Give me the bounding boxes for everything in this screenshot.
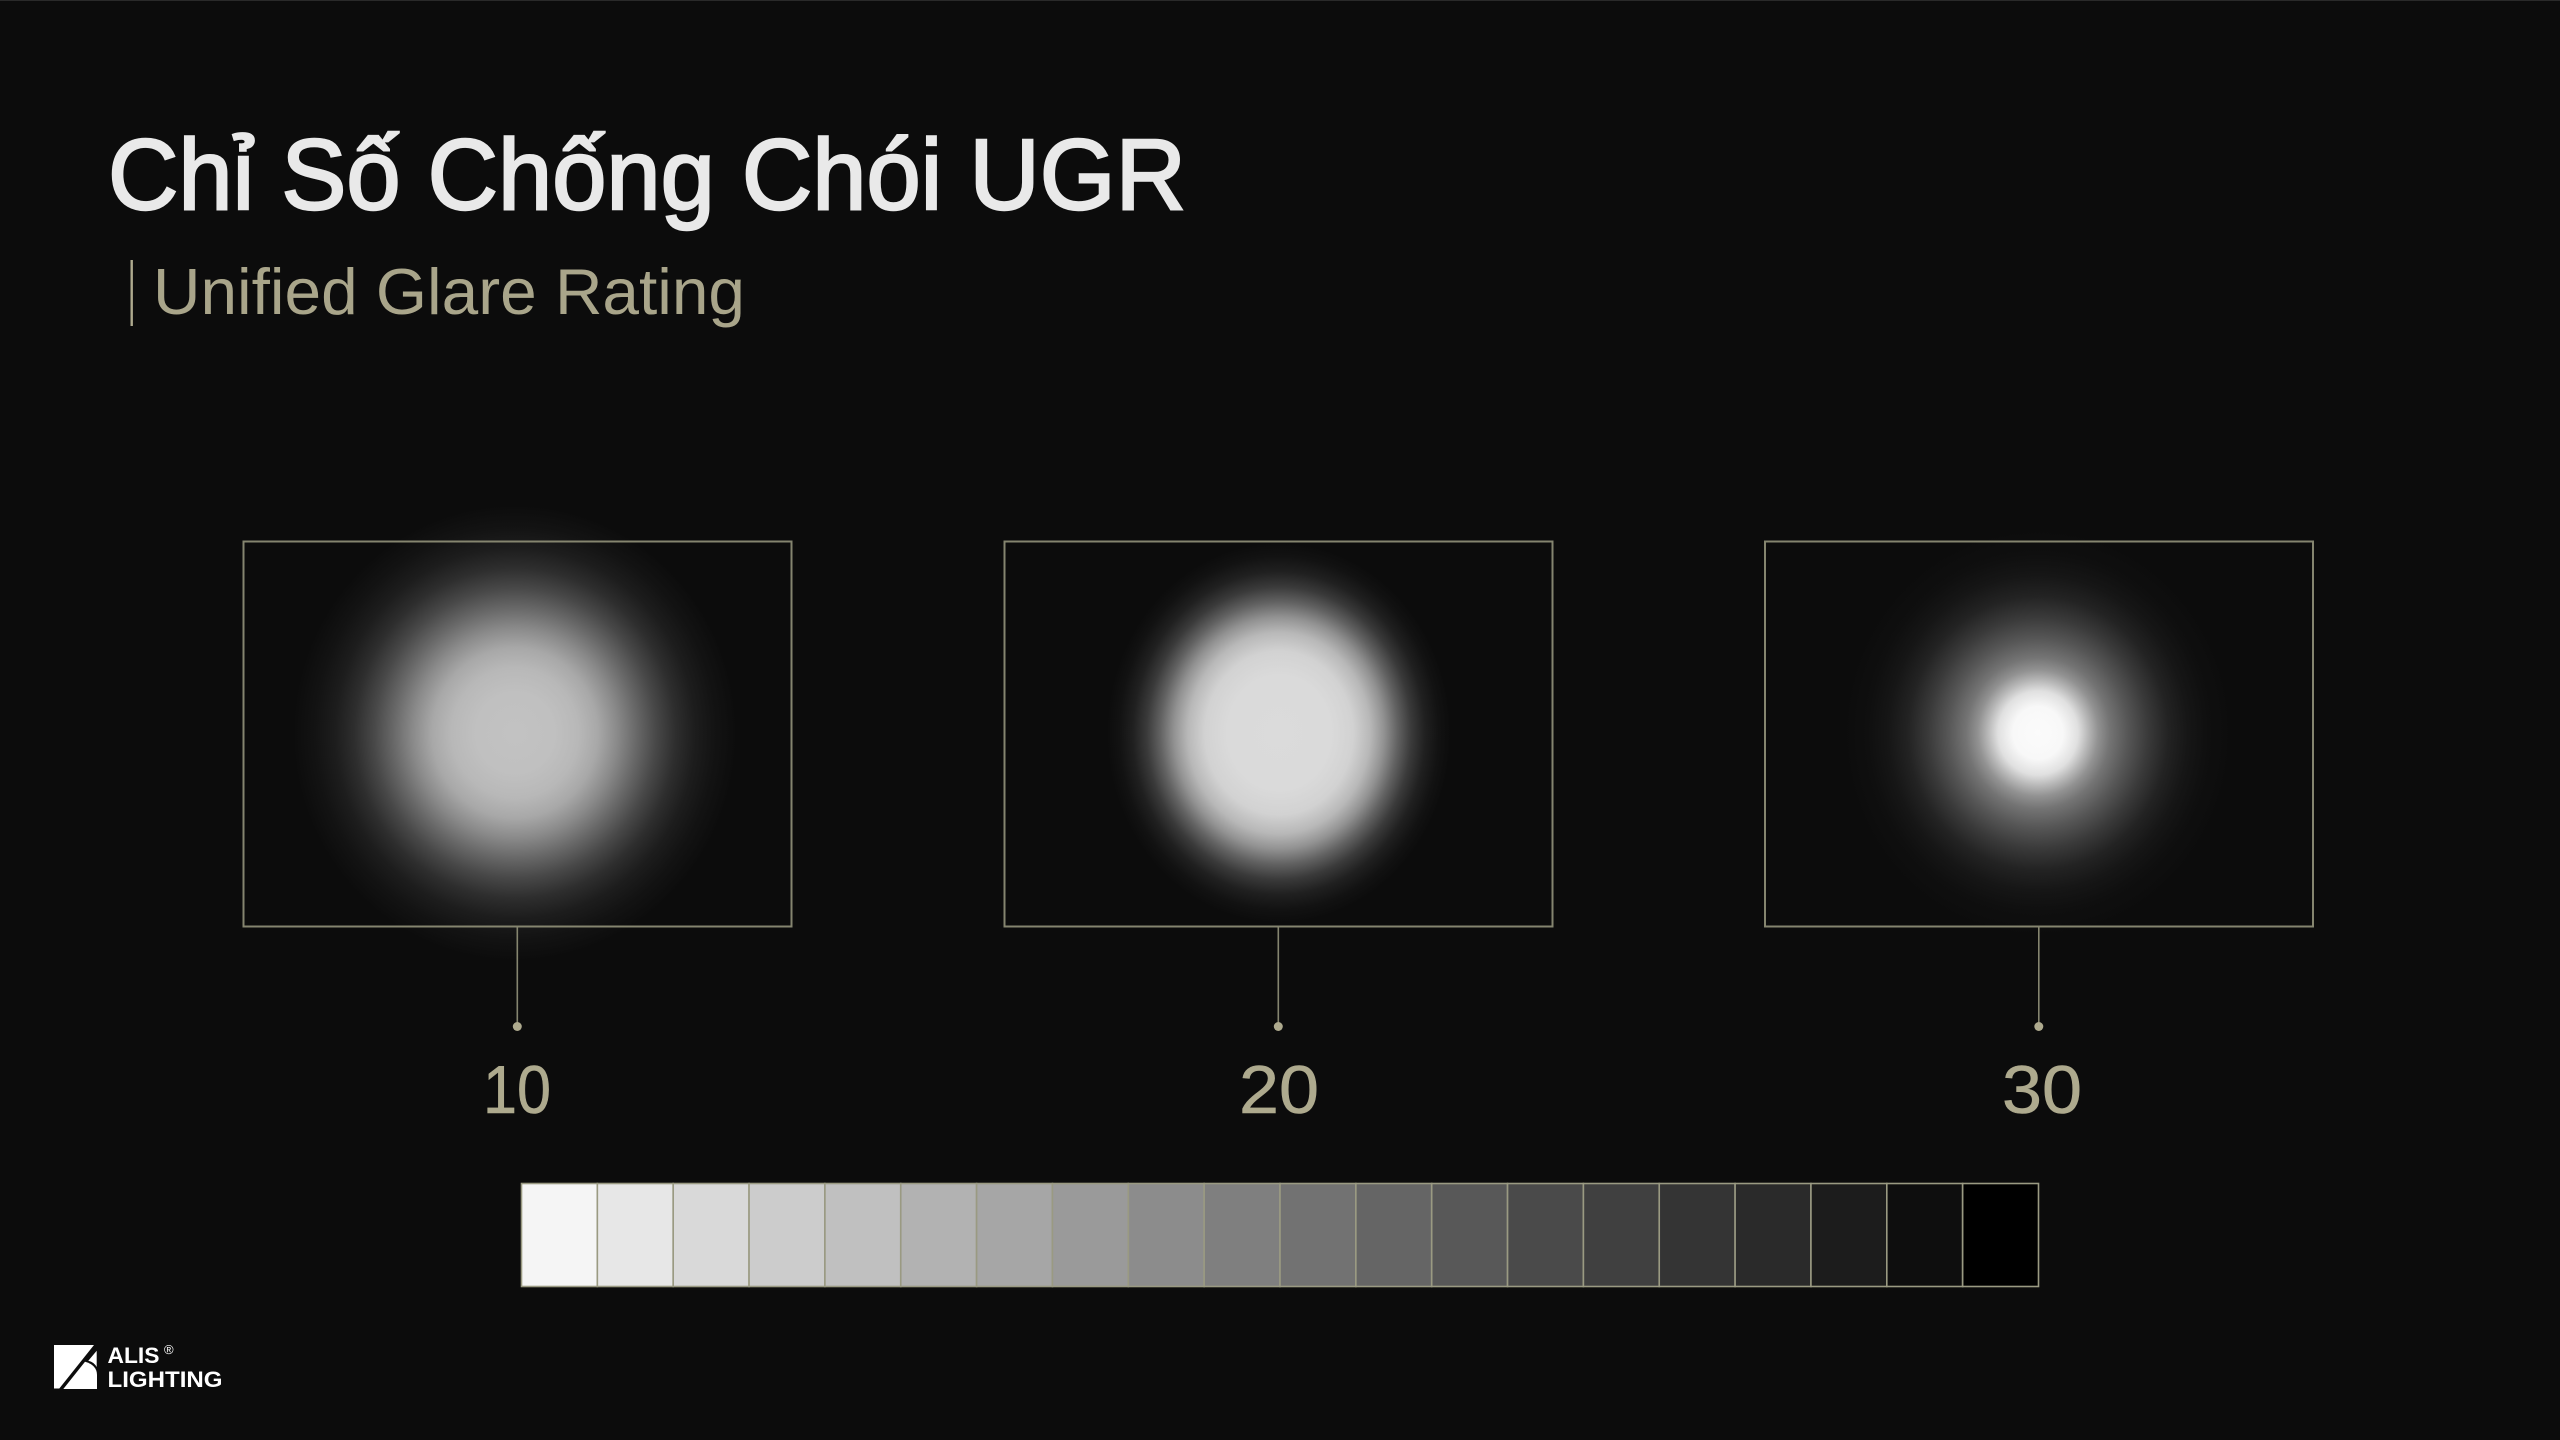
glow: soft wide light (293, 505, 737, 961)
connector: UGR 10 (513, 926, 522, 1031)
frame: UGR 10 (244, 542, 792, 926)
frame: UGR 30 (1765, 542, 2313, 926)
logo: Alis Lighting (54, 1342, 222, 1392)
title: Chỉ Số Chống Chói UGR (108, 119, 1186, 231)
wordmark: ® (164, 1342, 174, 1357)
wordmark: ALIS (108, 1343, 160, 1368)
panel: UGR 20 glare sample (1004, 542, 1552, 1128)
icon: logo mark (54, 1345, 97, 1389)
subtitle: Unified Glare Rating: Unified Glare Rating (153, 255, 745, 328)
glow: concentrated bright light (1843, 528, 2233, 938)
connector: UGR 30 (2034, 926, 2043, 1031)
connector: UGR 20 (1274, 926, 1283, 1031)
frame: UGR 20 (1004, 542, 1552, 926)
panel: UGR 10 glare sample (244, 505, 792, 1128)
label: 30: 30 (2002, 1052, 2082, 1128)
grayscale strip (522, 1184, 2038, 1286)
glow: medium light (1107, 543, 1451, 923)
wordmark (108, 1342, 222, 1392)
label: 20: 20 (1239, 1052, 1319, 1128)
label: 10: 10 (483, 1052, 551, 1128)
wordmark: LIGHTING (108, 1367, 222, 1392)
panel: UGR 30 glare sample (1765, 528, 2313, 1128)
